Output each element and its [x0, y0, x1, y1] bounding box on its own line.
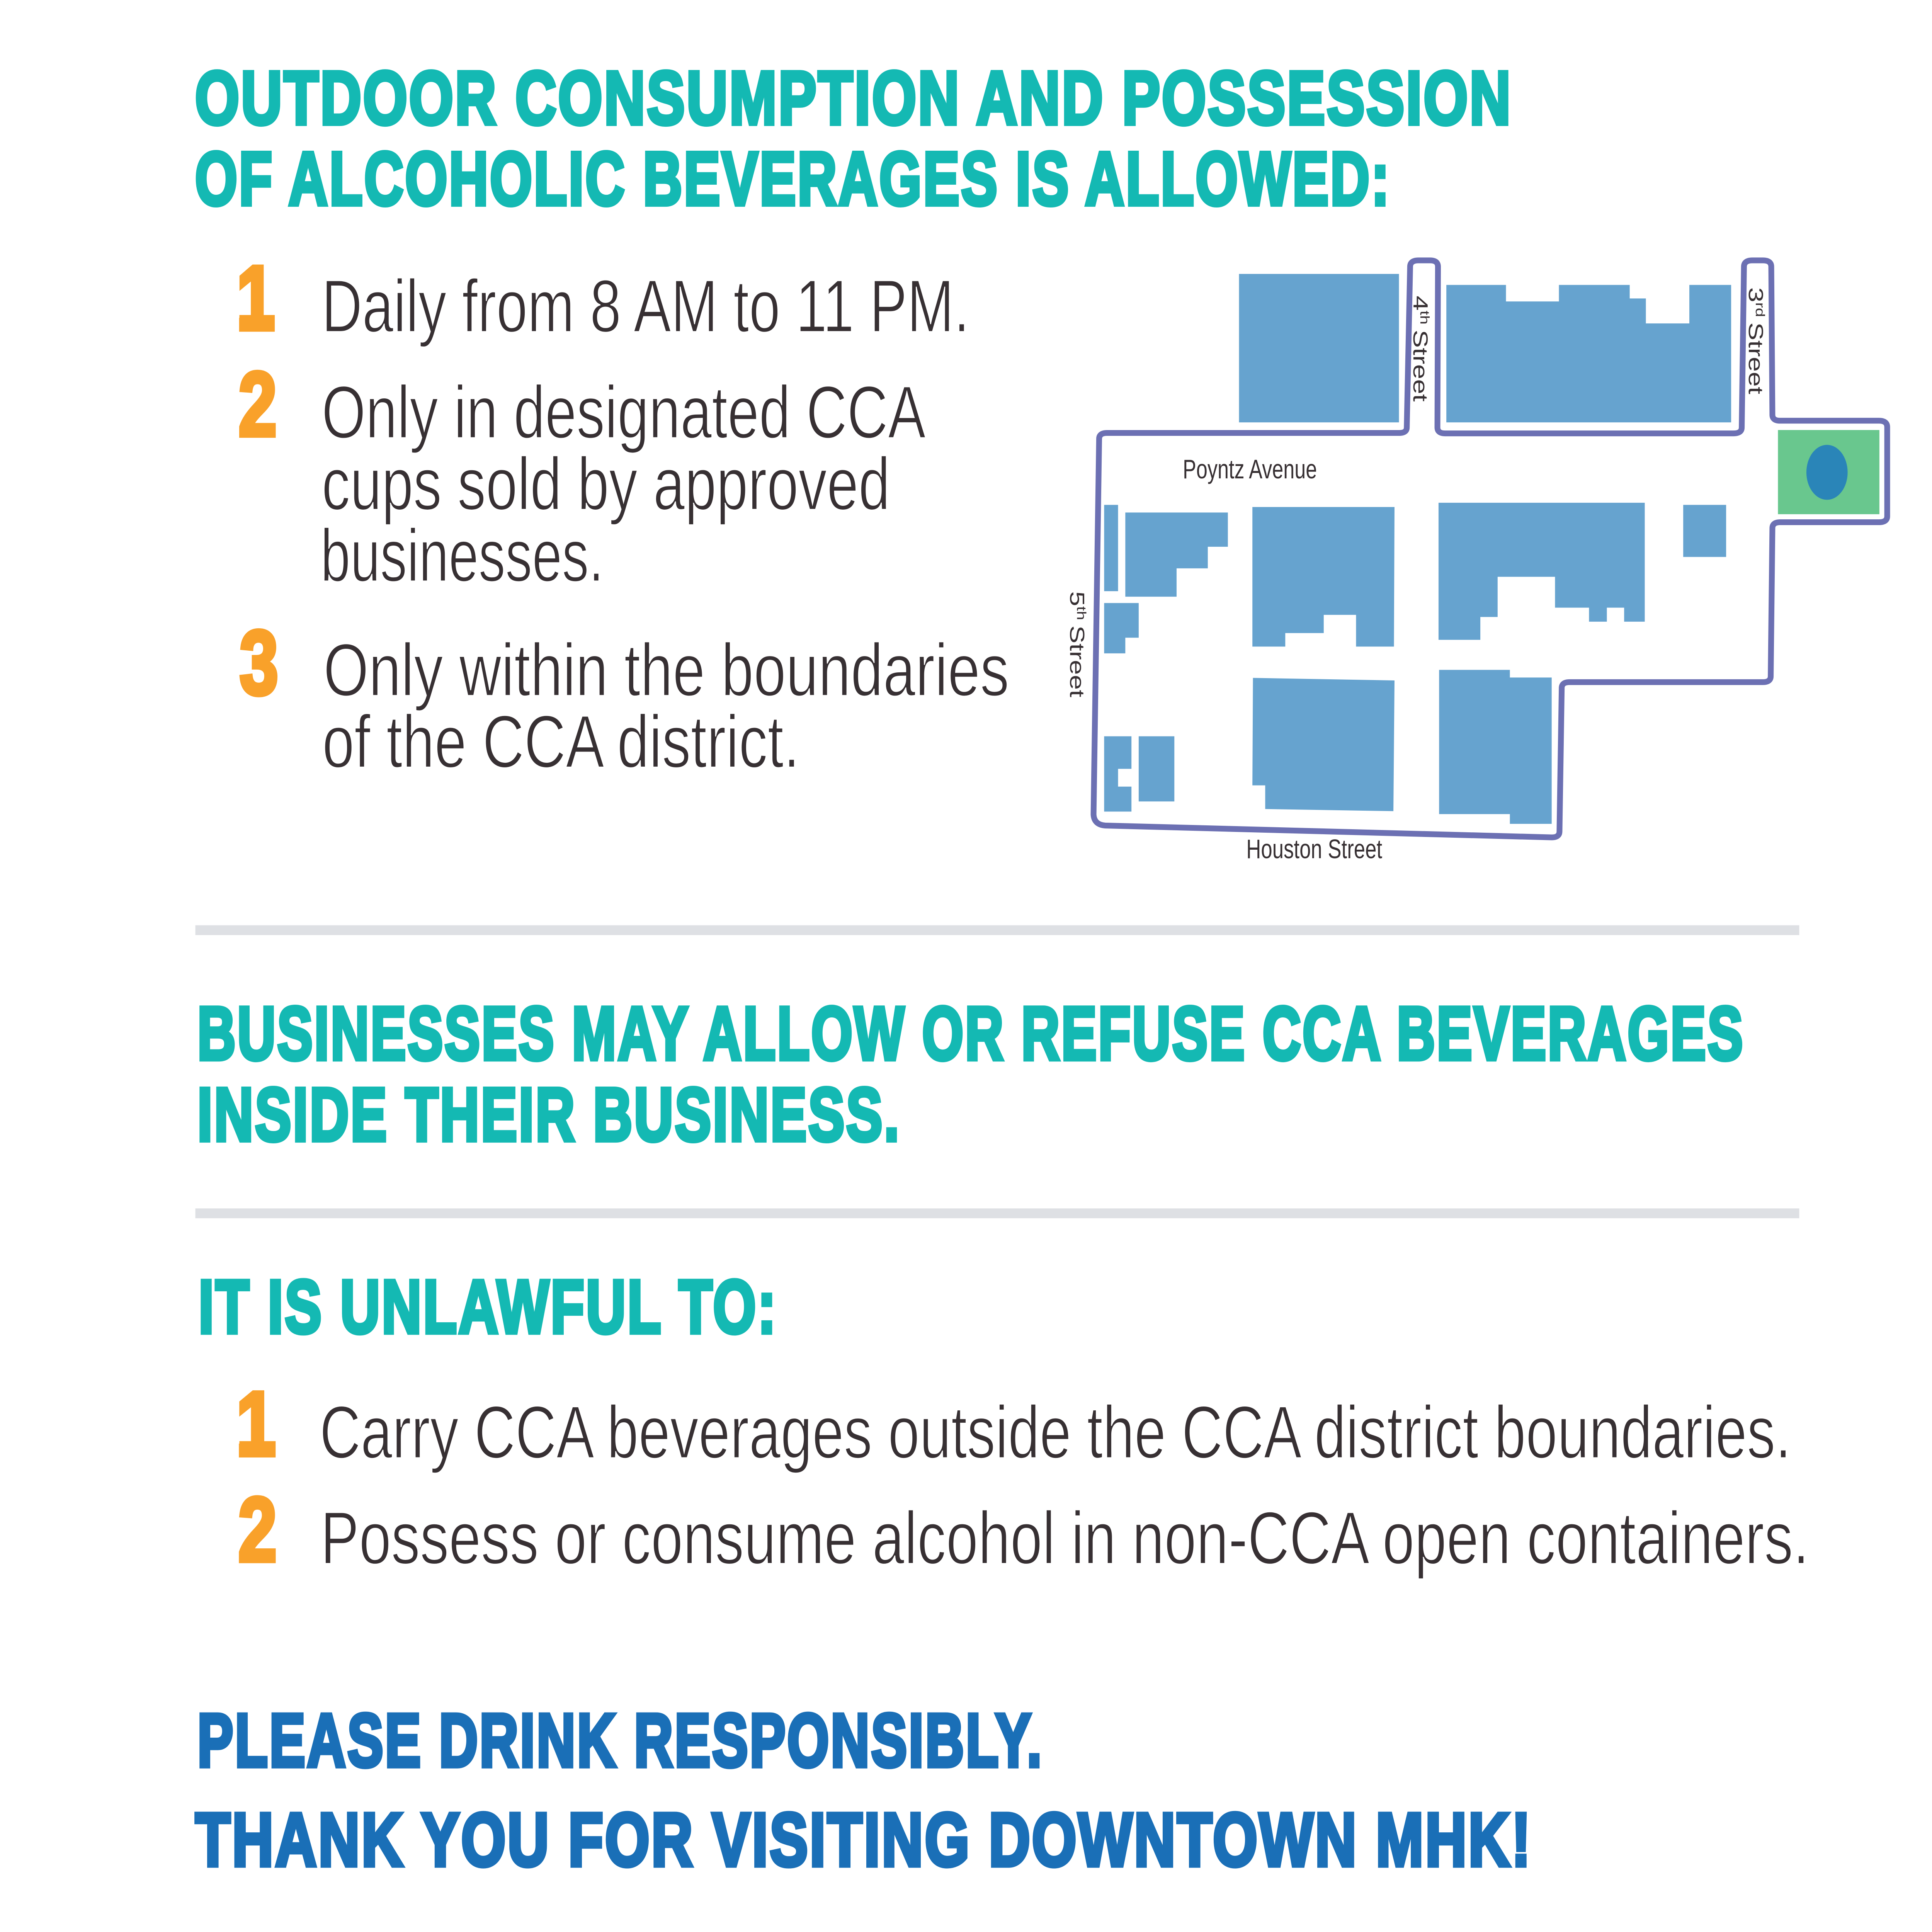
map boundary outline: [1094, 260, 1887, 837]
closing message: [196, 1698, 1532, 1882]
list item 3: district boundaries: Only within the boundaries: [323, 629, 1009, 712]
heading: outdoor consumption: [195, 56, 1512, 221]
street label: 3rd Street: rd: [1753, 302, 1767, 317]
divider: [196, 1208, 1799, 1218]
heading: it is unlawful to: IT IS UNLAWFUL TO:: [199, 1265, 777, 1349]
street label: 5th Street: th: [1074, 606, 1088, 620]
divider: [196, 925, 1799, 935]
street label: 4th Street: Street: [1409, 330, 1432, 401]
list item 2: designated cups: 2: [238, 354, 277, 455]
list item 2: designated cups: cups sold by approved: [322, 442, 890, 526]
street label: 3rd Street: 3: [1744, 287, 1767, 302]
panel: unlawful actions: [199, 1265, 1809, 1580]
list item 2: designated cups: [238, 354, 926, 597]
heading: businesses may allow or refuse: [197, 991, 1745, 1156]
panel: outdoor consumption rules: [195, 56, 1512, 783]
street label: Houston Street: Houston Street: [1246, 834, 1382, 864]
closing message: THANK YOU FOR VISITING DOWNTOWN MHK!: [196, 1798, 1532, 1882]
unlawful item 2: 2: [238, 1479, 277, 1580]
heading: outdoor consumption: OF ALCOHOLIC BEVERAGES IS ALLOWED:: [195, 136, 1391, 221]
map park with fountain: [1778, 430, 1879, 514]
street label: 5th Street: Street: [1065, 626, 1088, 697]
heading: outdoor consumption: OUTDOOR CONSUMPTION AND POSSESSION: [195, 56, 1512, 140]
unlawful item 1: Carry CCA beverages outside the CCA district boundaries.: [320, 1391, 1791, 1474]
map: CCA district: [1065, 260, 1887, 864]
list item 1: hours: 1: [236, 247, 275, 349]
heading: businesses may allow or refuse: INSIDE THEIR BUSINESS.: [197, 1072, 901, 1156]
street label: 4th Street: 4: [1409, 296, 1432, 311]
list item 2: designated cups: Only in designated CCA: [322, 371, 926, 454]
list item 3: district boundaries: 3: [240, 612, 278, 714]
map buildings: [1104, 274, 1731, 824]
unlawful item 2: Possess or consume alcohol in non-CCA open containers.: [321, 1497, 1809, 1580]
street label: 3rd Street: Street: [1744, 322, 1767, 394]
street label: 5th Street: 5: [1065, 591, 1088, 606]
street label: Poyntz Avenue: Poyntz Avenue: [1183, 454, 1317, 485]
list item 3: district boundaries: [240, 612, 1009, 783]
unlawful item 1: 1: [236, 1373, 276, 1475]
heading: businesses may allow or refuse: BUSINESSES MAY ALLOW OR REFUSE CCA BEVERAGES: [197, 991, 1745, 1075]
list item 3: district boundaries: of the CCA district.: [322, 700, 799, 783]
list item 2: designated cups: businesses.: [321, 514, 604, 597]
list item 1: hours: Daily from 8 AM to 11 PM.: [322, 265, 969, 348]
street label: 4th Street: th: [1417, 311, 1432, 325]
closing message: PLEASE DRINK RESPONSIBLY.: [197, 1698, 1043, 1782]
